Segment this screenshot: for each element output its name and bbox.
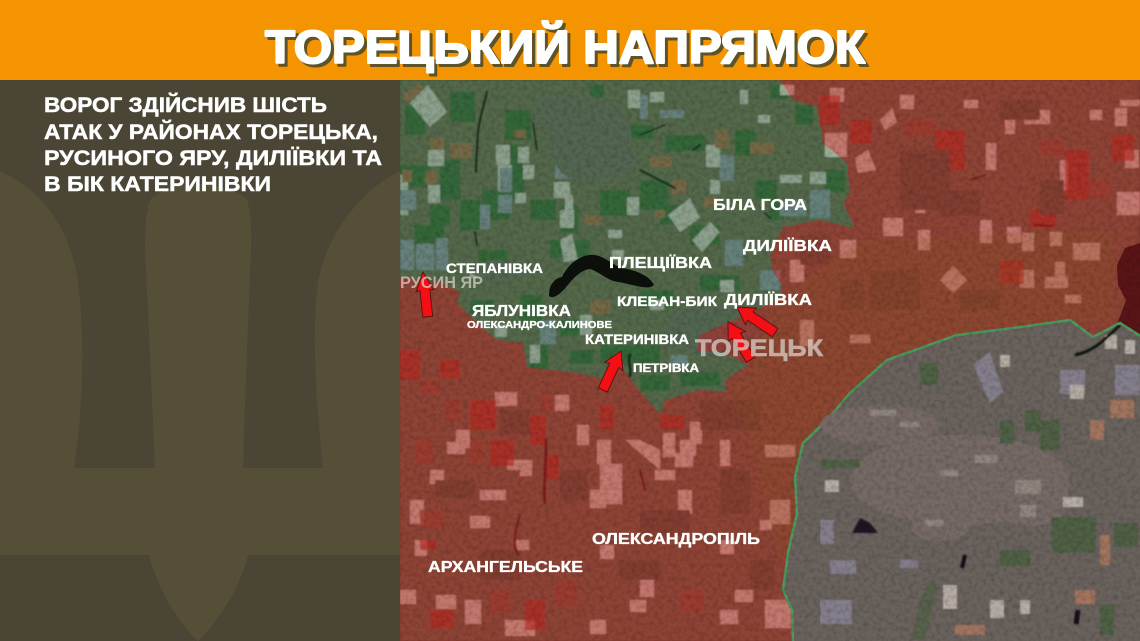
- title: ТОРЕЦЬКИЙ НАПРЯМОК: [265, 21, 866, 73]
- map: [400, 80, 1140, 641]
- label: Yablunivka: ЯБЛУНІВКА: [472, 303, 571, 320]
- label: Oleksandropil: ОЛЕКСАНДРОПІЛЬ: [592, 531, 760, 548]
- label: Pleshchiivka: ПЛЕЩІЇВКА: [609, 255, 712, 272]
- label: Dyliivka south: ДИЛІЇВКА: [724, 292, 812, 309]
- label: Stepanivka: СТЕПАНІВКА: [446, 261, 543, 276]
- text block: summary: [44, 93, 382, 196]
- label: Kleban-Byk: КЛЕБАН-БИК: [617, 294, 718, 309]
- arrow: Katerynivka: [594, 347, 630, 394]
- arrow: Toretsk: [719, 317, 759, 365]
- map: lake: [549, 255, 654, 297]
- map: green controlled area tint: [400, 80, 855, 414]
- label: Petrivka: ПЕТРІВКА: [633, 361, 699, 375]
- map labels: [400, 197, 832, 576]
- header bar: [0, 0, 1140, 80]
- label: Arkhanhelske: АРХАНГЕЛЬСЬКЕ: [428, 559, 583, 576]
- emblem: trident watermark: [0, 171, 400, 641]
- arrow: Rusyn Yar: [414, 271, 437, 318]
- label: Dyliivka north: ДИЛІЇВКА: [743, 238, 832, 255]
- map: satellite fields: [400, 80, 1140, 641]
- map: dark ravines: [475, 92, 1052, 555]
- label: Katerynivka: КАТЕРИНІВКА: [585, 332, 689, 347]
- left panel: [0, 80, 400, 641]
- text block: summary: РУСИНОГО ЯРУ, ДИЛІЇВКИ ТА: [44, 147, 382, 170]
- label: Rusyn Yar: РУСИН ЯР: [400, 273, 483, 292]
- title: ТОРЕЦЬКИЙ НАПРЯМОК: [268, 24, 869, 76]
- arrow: Dyliivka: [731, 299, 781, 341]
- text block: summary: АТАК У РАЙОНАХ ТОРЕЦЬКА,: [44, 120, 378, 144]
- label: Bila Hora: БІЛА ГОРА: [713, 197, 807, 214]
- text block: summary: В БІК КАТЕРИНІВКИ: [44, 173, 271, 196]
- map: occupied area in red: [400, 80, 1140, 641]
- map: reservoir on the east: [1117, 243, 1140, 336]
- label: Oleksandro-Kalynove: ОЛЕКСАНДРО-КАЛИНОВЕ: [467, 319, 612, 331]
- text block: summary: ВОРОГ ЗДІЙСНИВ ШІСТЬ: [44, 93, 327, 117]
- label: Toretsk: ТОРЕЦЬК: [695, 335, 823, 362]
- map: paper grain: [400, 80, 1140, 641]
- map: warmer eastern tone: [730, 230, 1115, 560]
- map: unoccupied grey area: [783, 320, 1140, 641]
